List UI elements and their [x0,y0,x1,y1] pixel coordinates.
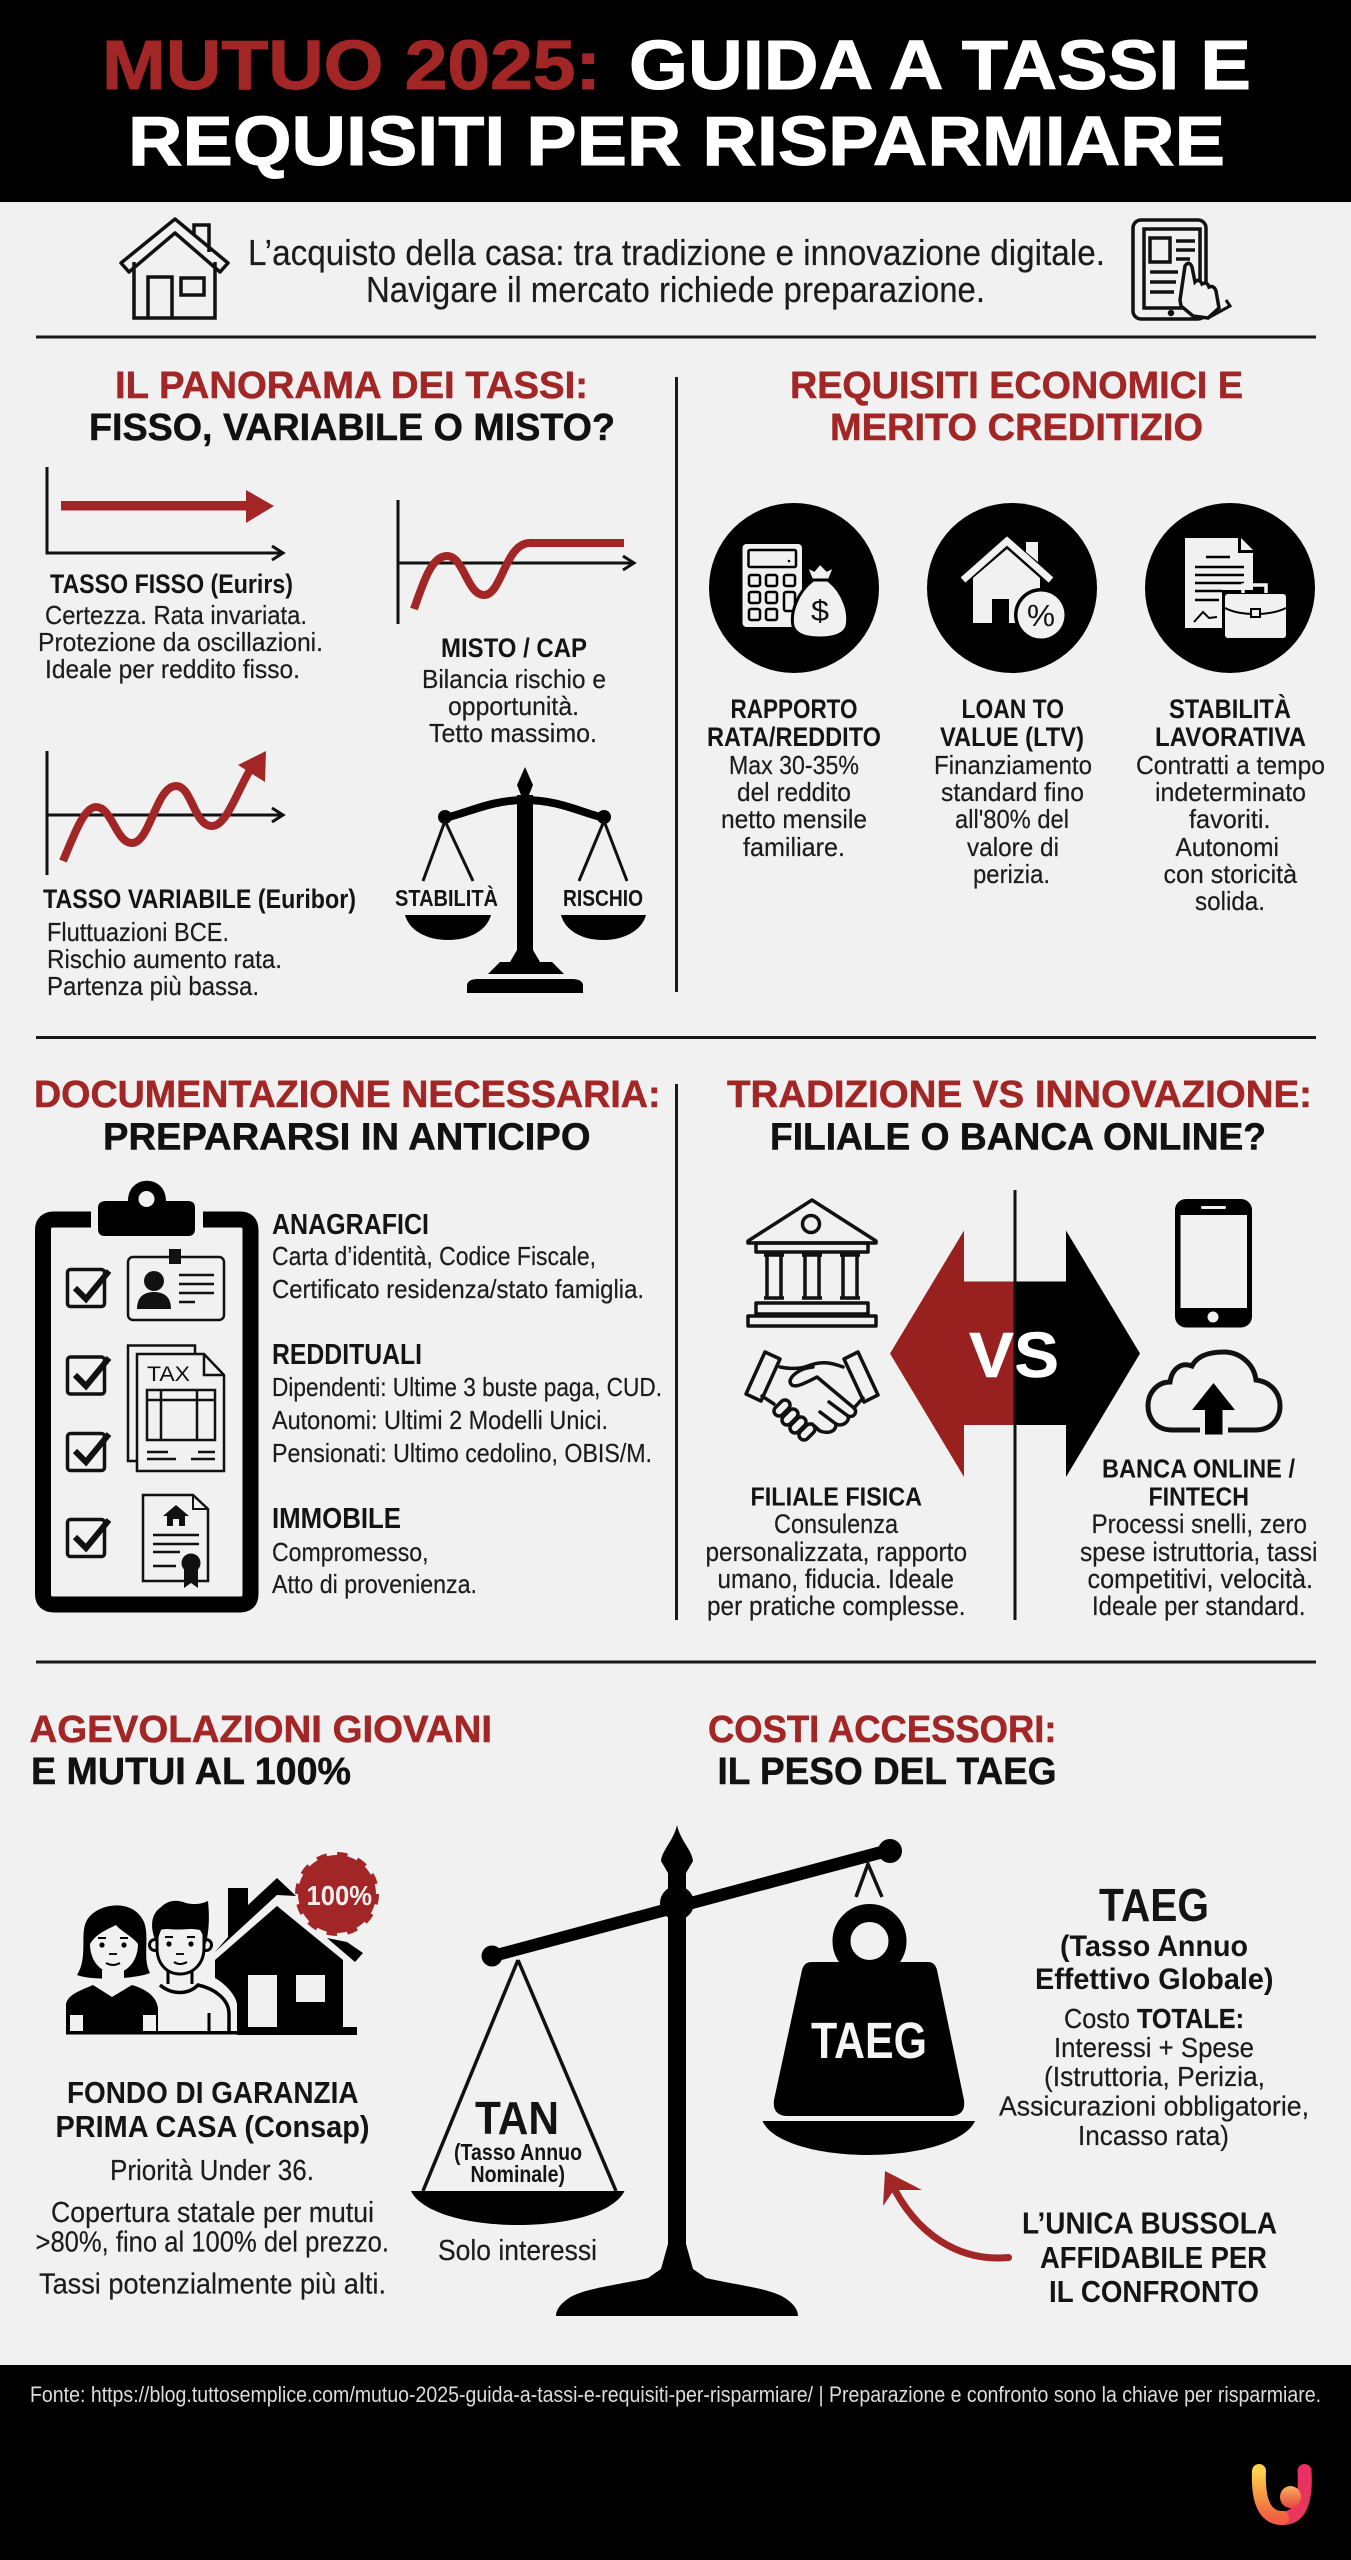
text: banca online: competitivi, velocità. [1088,1564,1313,1594]
text: immobile: Compromesso, [272,1537,428,1567]
text: anagrafici: ANAGRAFICI [272,1209,429,1241]
heading: documentazione: DOCUMENTAZIONE NECESSARIA: [34,1074,660,1116]
icon: bank building [748,1200,876,1326]
text: filiale fisica: umano, fiducia. Ideale [718,1564,954,1594]
text: reddituali: Dipendenti: Ultime 3 buste paga, CUD. [272,1372,662,1402]
text: rapporto rata reddito: familiare. [743,832,845,862]
text: tasso fisso: Protezione da oscillazioni. [38,627,323,657]
text: filiale fisica: per pratiche complesse. [707,1591,966,1621]
divider [36,336,1316,338]
text: rapporto rata reddito: RAPPORTO [730,694,858,724]
callout: unica bussola [1022,2206,1277,2309]
icon: calculator and money bag [709,503,879,673]
icon: balance stabilita rischio: STABILITÀ [395,884,498,911]
text: misto cap [422,633,606,748]
text: tasso variabile: TASSO VARIABILE (Euribor) [43,884,356,914]
text: fondo di garanzia [36,2075,389,2300]
text: tasso fisso: TASSO FISSO (Eurirs) [50,569,293,599]
title [102,26,1251,180]
text: loan to value: LOAN TO [962,694,1064,724]
heading: tradizione vs innovazione: FILIALE O BANCA ONLINE? [770,1116,1266,1158]
text: rapporto rata reddito: RATA/REDDITO [707,722,881,752]
heading: costi accessori: IL PESO DEL TAEG [718,1751,1056,1793]
intro text: L’acquisto della casa: tra tradizione e innovazione digitale. [248,232,1105,273]
badge 100 percent: 100% [306,1880,372,1911]
text: loan to value: valore di [967,832,1059,862]
badge 100 percent [298,1855,376,1933]
icon: tax documents [128,1346,224,1471]
panel: tassi [38,365,646,1001]
text: stabilita lavorativa: con storicità [1164,859,1298,889]
icon: balance stabilita rischio [395,767,646,993]
heading: agevolazioni [30,1709,492,1793]
icon: document and briefcase [1145,503,1315,673]
text: stabilita lavorativa: solida. [1195,886,1265,916]
text: fondo di garanzia: Tassi potenzialmente più alti. [39,2268,386,2300]
text: stabilita lavorativa: LAVORATIVA [1155,722,1306,752]
text: taeg: Incasso rata) [1078,2120,1229,2151]
text: misto cap: opportunità. [448,691,579,721]
text: taeg: (Tasso Annuo [1060,1930,1248,1963]
text: loan to value: standard fino [941,777,1084,807]
heading: requisiti: REQUISITI ECONOMICI E [790,365,1243,407]
text: immobile: Atto di provenienza. [272,1569,477,1599]
text: taeg: (Istruttoria, Perizia, [1044,2061,1265,2092]
icon: handshake [746,1352,878,1435]
text: tasso fisso [38,569,323,684]
chart: tasso variabile [47,751,283,875]
icon: vs double arrow: VS [969,1319,1059,1391]
logo [1259,2471,1305,2518]
panel: agevolazioni giovani [30,1709,492,2300]
text: banca online: Ideale per standard. [1092,1591,1306,1621]
icon: id card [128,1249,224,1320]
title: REQUISITI PER RISPARMIARE [128,102,1225,180]
text: filiale fisica: Consulenza [774,1509,899,1539]
text: stabilita lavorativa: indeterminato [1155,777,1306,807]
text: banca online [1080,1454,1318,1621]
text: anagrafici: Certificato residenza/stato famiglia. [272,1274,644,1304]
heading: requisiti: MERITO CREDITIZIO [830,407,1203,449]
text: loan to value: perizia. [973,859,1050,889]
text: tan [438,2092,597,2267]
text: reddituali [272,1339,662,1468]
icon: clipboard checklist [43,1181,250,1604]
icon: smartphone [1175,1199,1252,1328]
text: misto cap: Tetto massimo. [429,718,597,748]
icon: tax documents: TAX [147,1363,190,1386]
text: rapporto rata reddito: del reddito [737,777,851,807]
arrow: curved red [883,2171,1008,2258]
text: tasso fisso: Ideale per reddito fisso. [45,654,300,684]
text: tasso variabile [43,884,356,1001]
text: fondo di garanzia: Priorità Under 36. [110,2155,314,2187]
text: filiale fisica [706,1482,967,1621]
checkboxes [68,1270,109,1556]
icon: house with percent: % [1027,598,1055,633]
text: taeg: Assicurazioni obbligatorie, [999,2090,1309,2122]
icon: calculator and money bag: $ [811,595,829,628]
heading: panorama dei tassi [89,365,615,449]
text: rapporto rata reddito: netto mensile [721,804,867,834]
text: tasso variabile: Fluttuazioni BCE. [47,917,229,947]
text: misto cap: Bilancia rischio e [422,664,606,694]
text: banca online: Processi snelli, zero [1092,1509,1307,1539]
text: anagrafici: Carta d’identità, Codice Fiscale, [272,1241,596,1271]
text: tan: Nominale) [470,2161,565,2187]
intro band [121,219,1230,319]
chart: tasso fisso [47,467,283,560]
heading: tradizione vs innovazione [727,1074,1312,1158]
text: fondo di garanzia: >80%, fino al 100% del prezzo. [36,2226,389,2258]
callout: unica bussola: L’UNICA BUSSOLA [1022,2206,1277,2240]
text: reddituali: Pensionati: Ultimo cedolino, OBIS/M. [272,1438,652,1468]
callout: unica bussola: AFFIDABILE PER [1040,2240,1267,2275]
text: immobile [272,1503,477,1599]
icon: cloud upload [1148,1352,1280,1434]
text: tasso variabile: Rischio aumento rata. [47,944,282,974]
icon: big balance tan vs taeg [411,1825,975,2316]
text: rapporto rata reddito [707,694,881,862]
panel: documentazione [34,1074,662,1604]
heading: documentazione [34,1074,660,1158]
title: GUIDA A TASSI E [629,26,1251,104]
header band [0,0,1351,202]
text: taeg: Interessi + Spese [1054,2032,1254,2063]
icon: balance stabilita rischio: RISCHIO [563,885,643,911]
text: banca online: spese istruttoria, tassi [1080,1537,1318,1567]
icon: property deed [143,1495,208,1588]
text: taeg: TAEG [1099,1879,1209,1931]
house [215,1878,363,2035]
text: tasso variabile: Partenza più bassa. [47,971,259,1001]
text: loan to value [934,694,1092,889]
text: taeg [999,1879,1309,2151]
text: filiale fisica: FILIALE FISICA [750,1482,922,1512]
text: fondo di garanzia: FONDO DI GARANZIA [67,2075,358,2110]
icon: vs double arrow [890,1230,1140,1477]
text: fondo di garanzia: PRIMA CASA (Consap) [56,2109,370,2144]
woman [66,1905,158,2033]
text: anagrafici [272,1209,644,1304]
text: tan: TAN [475,2092,559,2144]
text: rapporto rata reddito: Max 30-35% [729,750,859,780]
text: tasso fisso: Certezza. Rata invariata. [45,600,307,630]
text: misto cap: MISTO / CAP [441,633,587,663]
callout: unica bussola: IL CONFRONTO [1049,2274,1259,2309]
icon: tablet with pointing hand [1133,220,1230,319]
icon: house with percent [927,503,1097,673]
heading: panorama dei tassi: IL PANORAMA DEI TASSI: [115,365,588,407]
heading: documentazione: PREPARARSI IN ANTICIPO [103,1116,590,1158]
text: loan to value: VALUE (LTV) [940,722,1084,752]
text: tan: (Tasso Annuo [454,2139,582,2165]
text: stabilita lavorativa [1136,693,1325,916]
title: MUTUO 2025: [102,26,601,104]
text: fondo di garanzia: Copertura statale per mutui [51,2197,374,2229]
icon: house outline [121,219,228,318]
text: stabilita lavorativa: Autonomi [1176,832,1279,862]
heading: tradizione vs innovazione: TRADIZIONE VS INNOVAZIONE: [727,1074,1312,1116]
text: tan: Solo interessi [438,2235,597,2267]
chart: misto cap [398,500,634,624]
panel: requisiti [707,365,1325,916]
heading: panorama dei tassi: FISSO, VARIABILE O MISTO? [89,407,615,449]
heading: agevolazioni: AGEVOLAZIONI GIOVANI [30,1709,492,1751]
heading: requisiti [790,365,1243,449]
text: stabilita lavorativa: Contratti a tempo [1136,750,1325,780]
text: taeg: Effettivo Globale) [1035,1963,1274,1996]
text: loan to value: Finanziamento [934,750,1092,780]
heading: costi accessori: COSTI ACCESSORI: [708,1709,1056,1751]
text: stabilita lavorativa: STABILITÀ [1169,693,1291,724]
text: filiale fisica: personalizzata, rapporto [706,1537,967,1567]
man [150,1901,230,2033]
intro text: Navigare il mercato richiede preparazione. [366,269,985,310]
text: immobile: IMMOBILE [272,1503,401,1535]
footer band [0,2365,1351,2560]
heading: agevolazioni: E MUTUI AL 100% [31,1751,351,1793]
intro text [248,232,1105,310]
text: taeg: Costo TOTALE: [1064,2003,1244,2034]
text: stabilita lavorativa: favoriti. [1189,804,1270,834]
panel: costi accessori [411,1709,1309,2316]
text: reddituali: Autonomi: Ultimi 2 Modelli Unici. [272,1405,608,1435]
text: banca online: FINTECH [1148,1482,1249,1512]
heading: costi accessori [708,1709,1056,1793]
icon: young couple and house [66,1855,376,2035]
panel: tradizione vs innovazione [706,1074,1318,1621]
icon: big balance tan vs taeg: TAEG [811,2012,927,2069]
text: loan to value: all'80% del [955,804,1069,834]
text: banca online: BANCA ONLINE / [1102,1454,1295,1484]
text: reddituali: REDDITUALI [272,1339,422,1371]
